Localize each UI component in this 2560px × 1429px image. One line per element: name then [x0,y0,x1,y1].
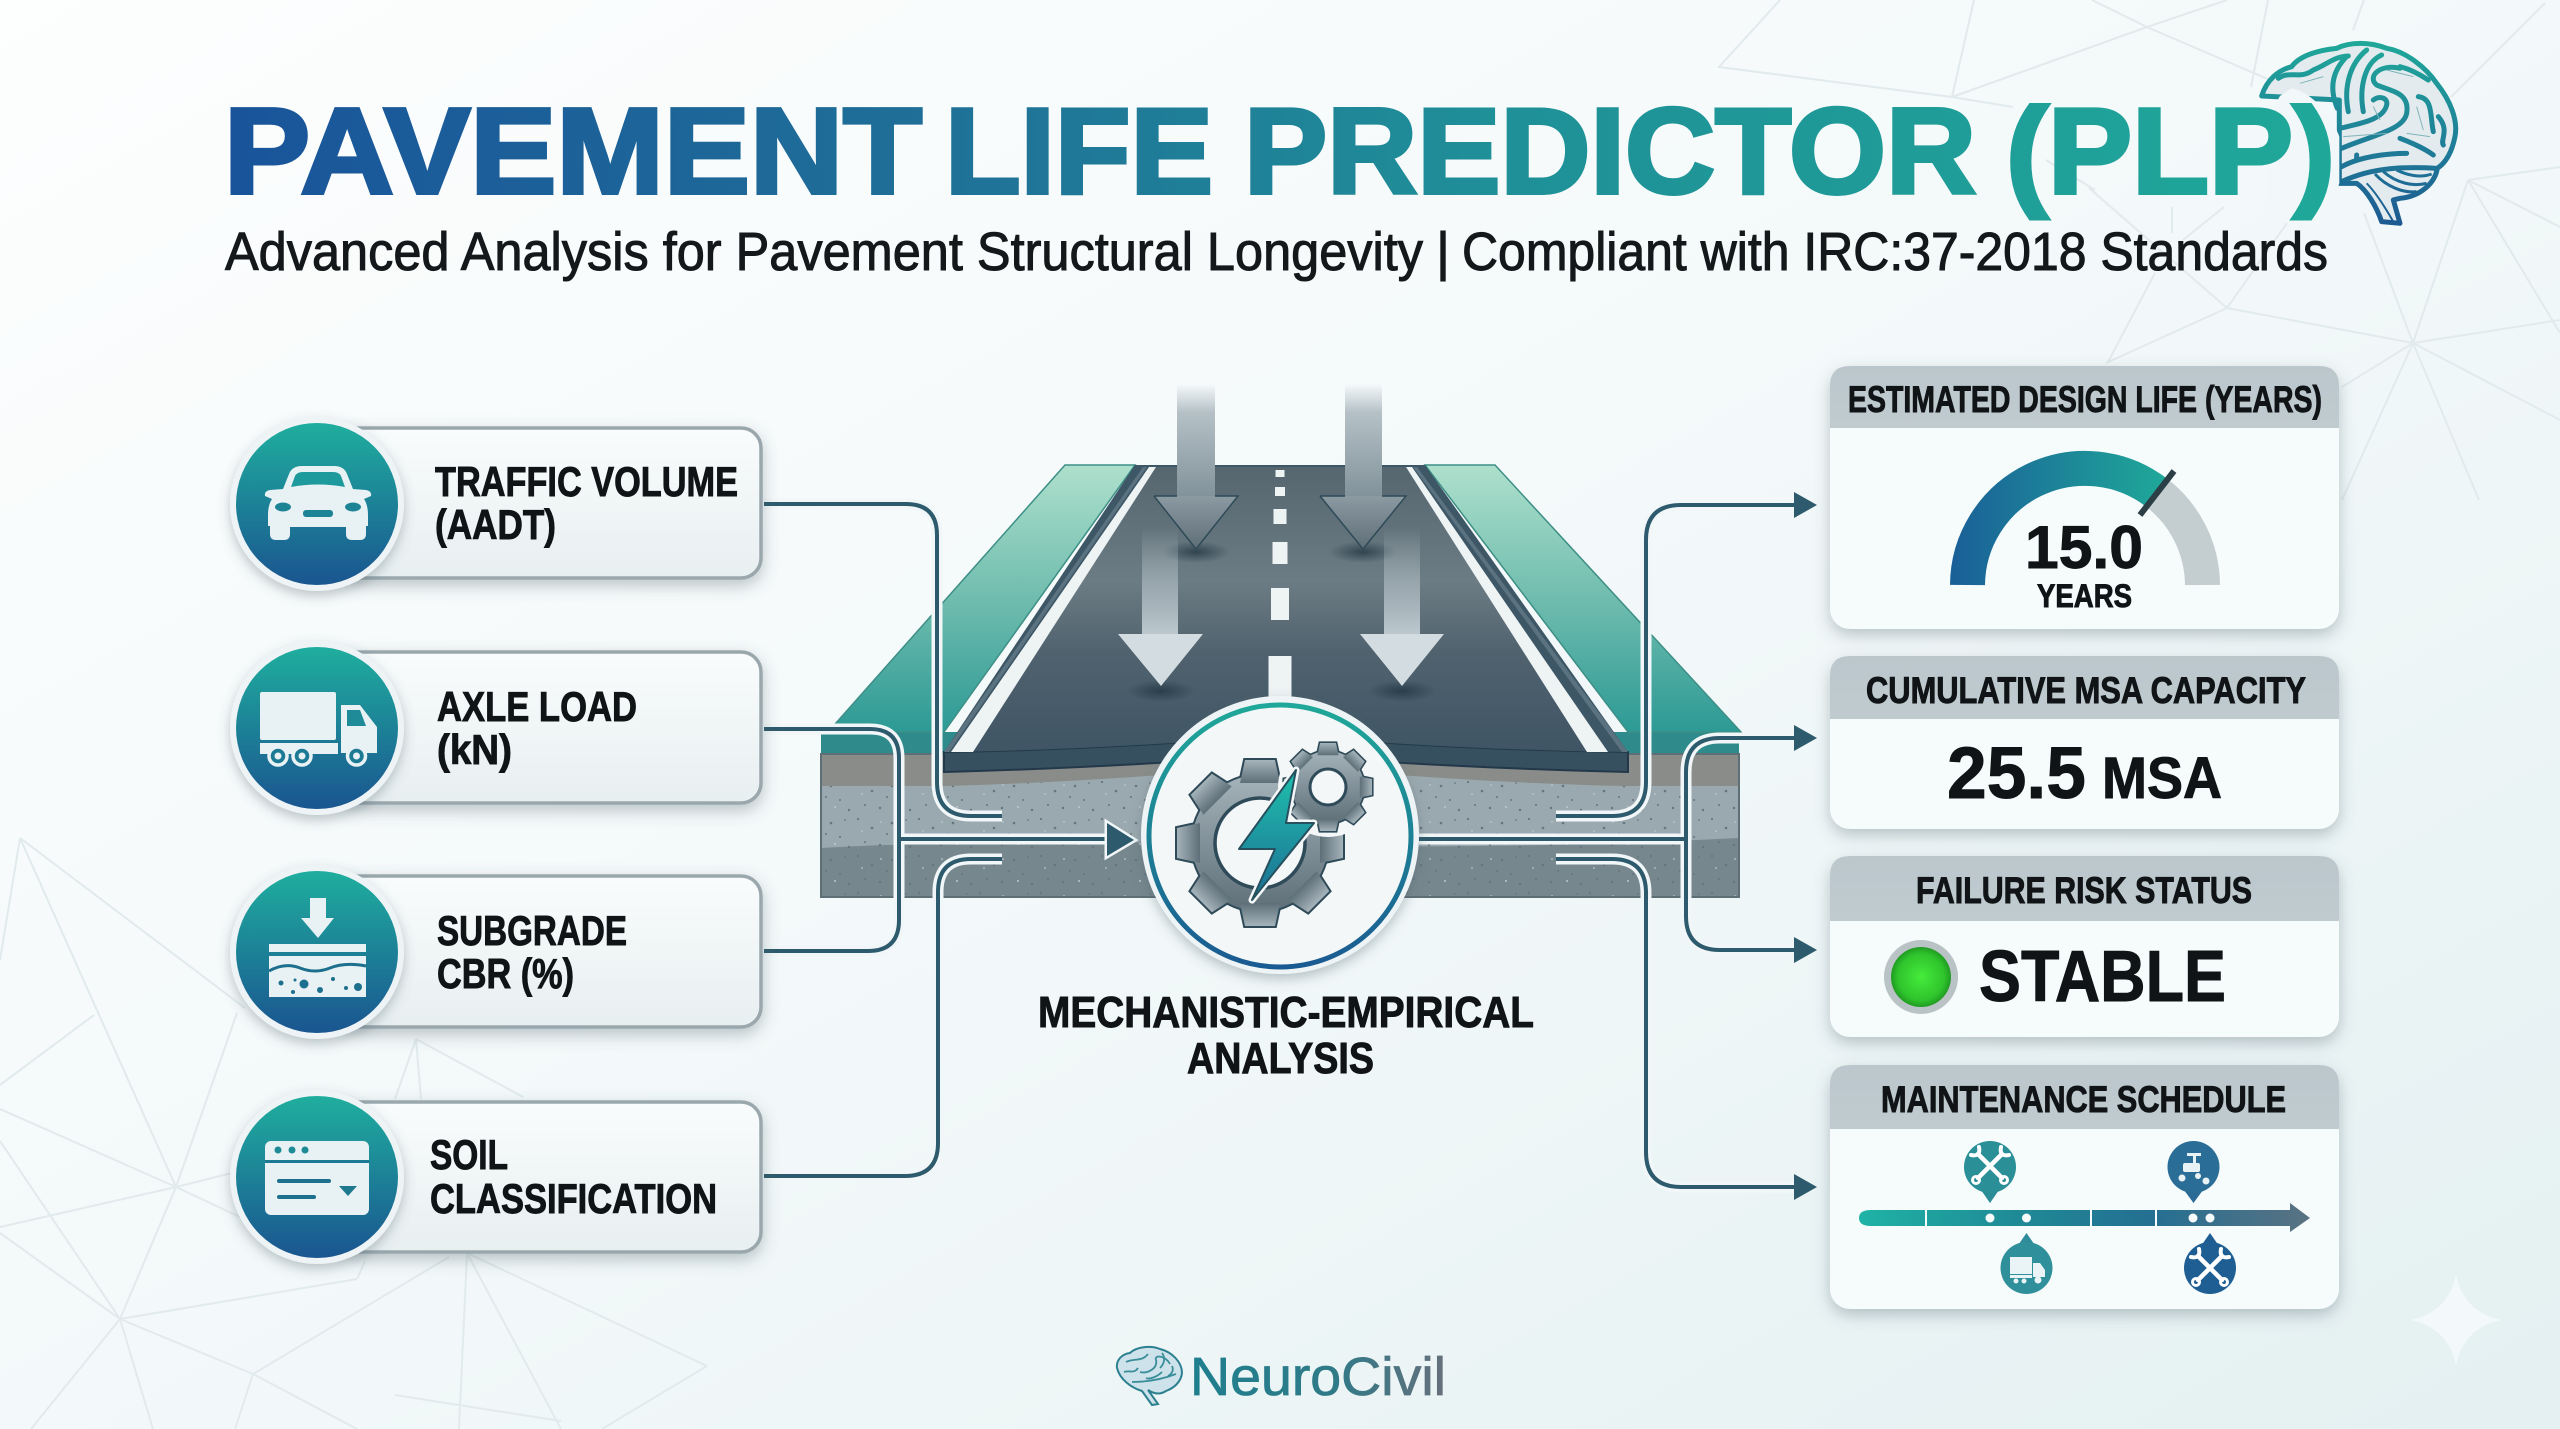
output card: cumulative MSA [1830,656,2339,829]
icon: small brain [1117,1347,1182,1405]
title: (PLP) [2006,83,2335,219]
icon: truck [260,692,377,765]
subtitle: | [1436,222,1450,282]
input card: axle load: AXLE LOAD [437,683,637,730]
subtitle [225,222,2328,282]
analysis label: MECHANISTIC-EMPIRICAL [1038,988,1534,1037]
analysis label [1038,988,1534,1083]
title: LIFE [945,83,1213,219]
input card: axle load: (kN) [437,726,512,773]
pin: truck [2000,1233,2052,1294]
footer logo: NeuroCivil: NeuroCivil [1190,1347,1446,1407]
input card: soil classification [230,1090,761,1264]
analysis engine badge [1141,696,1419,974]
input card: traffic volume: TRAFFIC VOLUME [435,458,738,505]
output card: maintenance schedule: MAINTENANCE SCHEDULE [1881,1079,2286,1120]
icon: car [265,466,371,540]
icon: gears with lightning bolt [1177,737,1378,926]
output card: estimated design life: YEARS [2037,578,2132,614]
icon: dropdown window [265,1141,369,1215]
input card: subgrade CBR: SUBGRADE [437,907,627,954]
soil layers [821,732,1739,897]
output card: failure risk: FAILURE RISK STATUS [1916,870,2252,911]
title: PAVEMENT [224,83,922,219]
output card: cumulative MSA: MSA [2102,746,2222,811]
green shoulders [828,465,1741,732]
title [224,83,2335,219]
pin: wrench [1964,1141,2016,1203]
input card: traffic volume: (AADT) [435,501,556,548]
output card: failure risk [1830,856,2339,1037]
subtitle: Advanced Analysis for Pavement Structural Longevity [225,222,1423,282]
pin: equipment [2168,1141,2220,1203]
output card: maintenance schedule [1830,1065,2339,1309]
input card: subgrade CBR: CBR (%) [437,950,574,997]
road surface [944,465,1628,772]
output card: estimated design life: ESTIMATED DESIGN LIFE (YEARS) [1848,379,2322,420]
connectors: inputs to analysis [764,504,1134,1176]
gauge [1968,468,2202,585]
title: PREDICTOR [1244,83,1976,219]
connectors: analysis to outputs [1419,492,1817,1200]
output card: estimated design life [1830,366,2339,629]
input card: subgrade CBR [230,865,761,1039]
status light [1884,940,1958,1014]
load arrows [1118,384,1444,702]
input card: traffic volume [230,417,761,591]
output card: cumulative MSA: 25.5 [1947,733,2086,814]
timeline [1859,1203,2310,1232]
icon: soil load [269,898,366,997]
input card: axle load [230,641,761,815]
subtitle: Compliant with IRC:37-2018 Standards [1462,222,2328,282]
input card: soil classification: CLASSIFICATION [430,1175,717,1222]
analysis label: ANALYSIS [1187,1034,1374,1083]
output card: failure risk: STABLE [1979,937,2226,1017]
brain icon top right [2262,43,2456,223]
pavement cross-section diagram [821,384,1741,897]
pin: wrench blue [2184,1233,2236,1294]
input card: soil classification: SOIL [430,1131,508,1178]
icon: sparkle watermark [2411,1275,2501,1365]
output card: estimated design life: 15.0 [2025,514,2143,581]
output card: cumulative MSA: CUMULATIVE MSA CAPACITY [1866,670,2306,711]
